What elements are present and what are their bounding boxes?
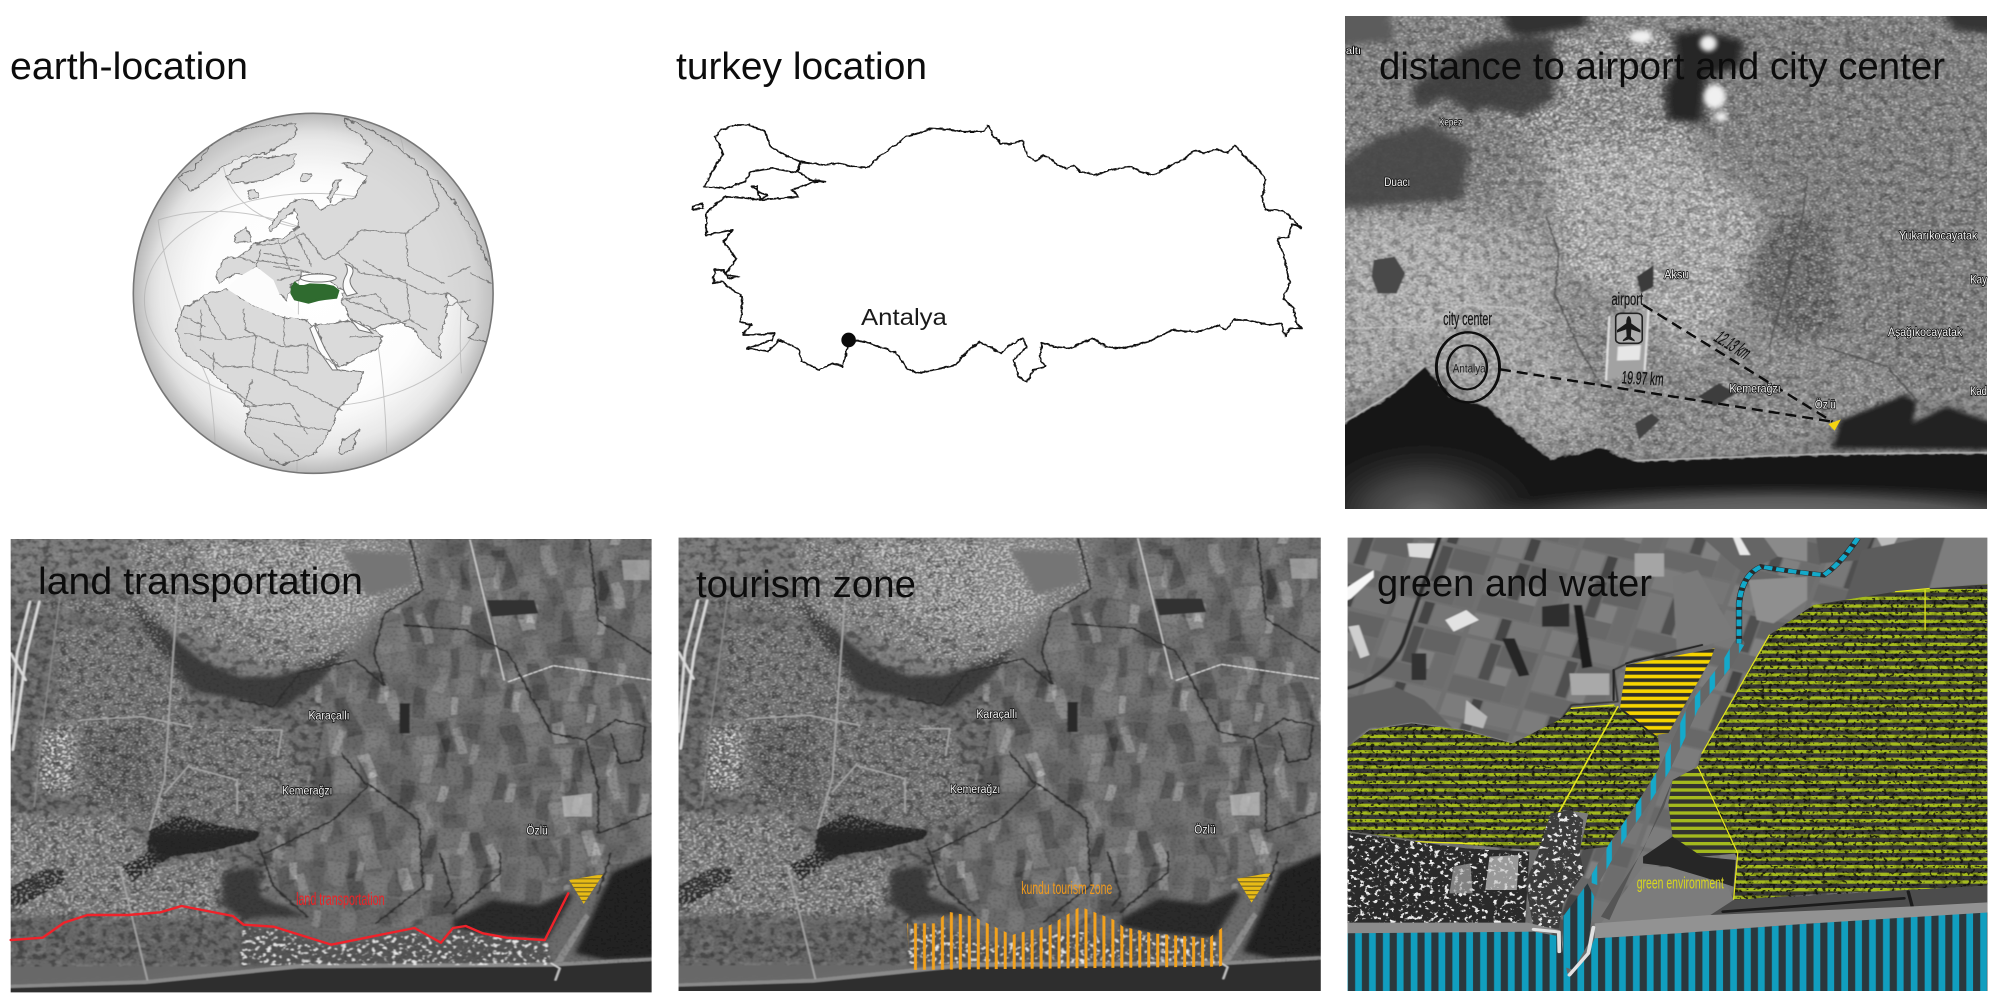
labels on the map: Kad — [1970, 384, 1987, 398]
place names: Özlü — [1194, 821, 1216, 836]
panel: distance to airport and city center — [1345, 16, 1988, 509]
urban texture — [1496, 33, 1761, 367]
satellite map: Antalya region — [1345, 16, 1988, 509]
labels on the map — [1346, 46, 1987, 411]
place names: Kemerağzı — [282, 784, 332, 797]
canal and river with cyan hatching — [1563, 538, 1858, 970]
labels on the map: Aşağıkocayatak — [1888, 325, 1962, 339]
globe contents — [133, 85, 498, 473]
hotels and resort — [1340, 810, 1584, 933]
labels on the map: Özlü — [1815, 398, 1836, 411]
satellite map: green and water: green environment — [1637, 874, 1724, 893]
striped yellow site — [1620, 648, 1715, 735]
labels on the map: 19.97 km — [1621, 368, 1665, 390]
country borders — [184, 180, 491, 457]
panel: earth location — [10, 46, 498, 473]
title: green and water: green and water — [1377, 563, 1652, 605]
place names: Özlü — [526, 822, 548, 837]
title: distance to airport and city center: distance to airport and city center — [1379, 46, 1945, 88]
inland seas — [226, 264, 373, 370]
label: Antalya: Antalya — [861, 304, 947, 330]
place names: Karaçallı — [976, 708, 1017, 721]
hatched tourism zone — [907, 907, 1228, 970]
place names — [950, 708, 1216, 836]
map: Turkey outline — [691, 123, 1303, 382]
place names — [282, 709, 548, 837]
forest: left — [1340, 705, 1660, 850]
labels on the map: Kepez — [1439, 117, 1462, 128]
Turkey in green — [291, 283, 338, 303]
lowland and marsh — [1595, 780, 2000, 938]
city center rings — [1436, 332, 1500, 402]
base photo tones — [1345, 16, 1987, 509]
marker: Antalya — [841, 333, 856, 347]
place names: Kemerağzı — [950, 783, 1000, 796]
labels on the map: Duacı — [1384, 175, 1410, 189]
panel: turkey location — [676, 46, 1301, 382]
title: land transportation: land transportation — [38, 561, 363, 603]
globe shading — [133, 113, 493, 473]
labels on the map: altı — [1346, 46, 1361, 57]
airport runway — [1607, 310, 1647, 380]
marker: site triangle — [1828, 419, 1841, 431]
labels on the map: Aksu — [1664, 268, 1689, 281]
title: turkey location: turkey location — [676, 46, 927, 88]
title: earth-location: earth-location — [10, 46, 248, 88]
forest: right — [1668, 583, 2000, 900]
labels on the map: Kemerağzı — [1729, 382, 1781, 395]
landmasses — [175, 118, 498, 465]
panel: green and water — [1340, 533, 2000, 1000]
graticule — [144, 137, 478, 472]
sea with cyan hatching — [1340, 912, 2000, 1000]
satellite map: green and water — [1348, 538, 1988, 991]
satellite map with tourism zone — [678, 538, 1321, 991]
rivers and roads — [1546, 177, 1917, 400]
globe outline — [133, 113, 493, 473]
icon: airplane — [1616, 313, 1642, 343]
labels on the map: Antalya — [1453, 362, 1486, 375]
labels on the map: 12.13 km — [1709, 328, 1756, 363]
title: tourism zone: tourism zone — [696, 564, 916, 606]
satellite map with tourism zone: kundu tourism zone — [1021, 879, 1112, 898]
sea — [1345, 366, 1987, 509]
forest near site — [1832, 395, 2000, 450]
dashed distance lines — [1500, 305, 1832, 422]
panel: tourism zone — [668, 505, 1377, 1004]
breakwaters — [1534, 927, 1593, 975]
satellite map with road — [10, 539, 652, 992]
labels on the map: city center — [1443, 308, 1492, 329]
route: red road line — [11, 893, 568, 945]
labels on the map: Kay — [1970, 273, 1987, 286]
panel: land transportation — [0, 507, 709, 1004]
labels on the map: airport — [1611, 290, 1643, 309]
globe with Turkey highlighted — [132, 112, 494, 474]
cloud highlights — [1629, 30, 1727, 121]
place names: Karaçallı — [309, 709, 350, 722]
satellite map with road: land transportation — [296, 890, 385, 909]
farmland — [1340, 533, 2000, 1000]
